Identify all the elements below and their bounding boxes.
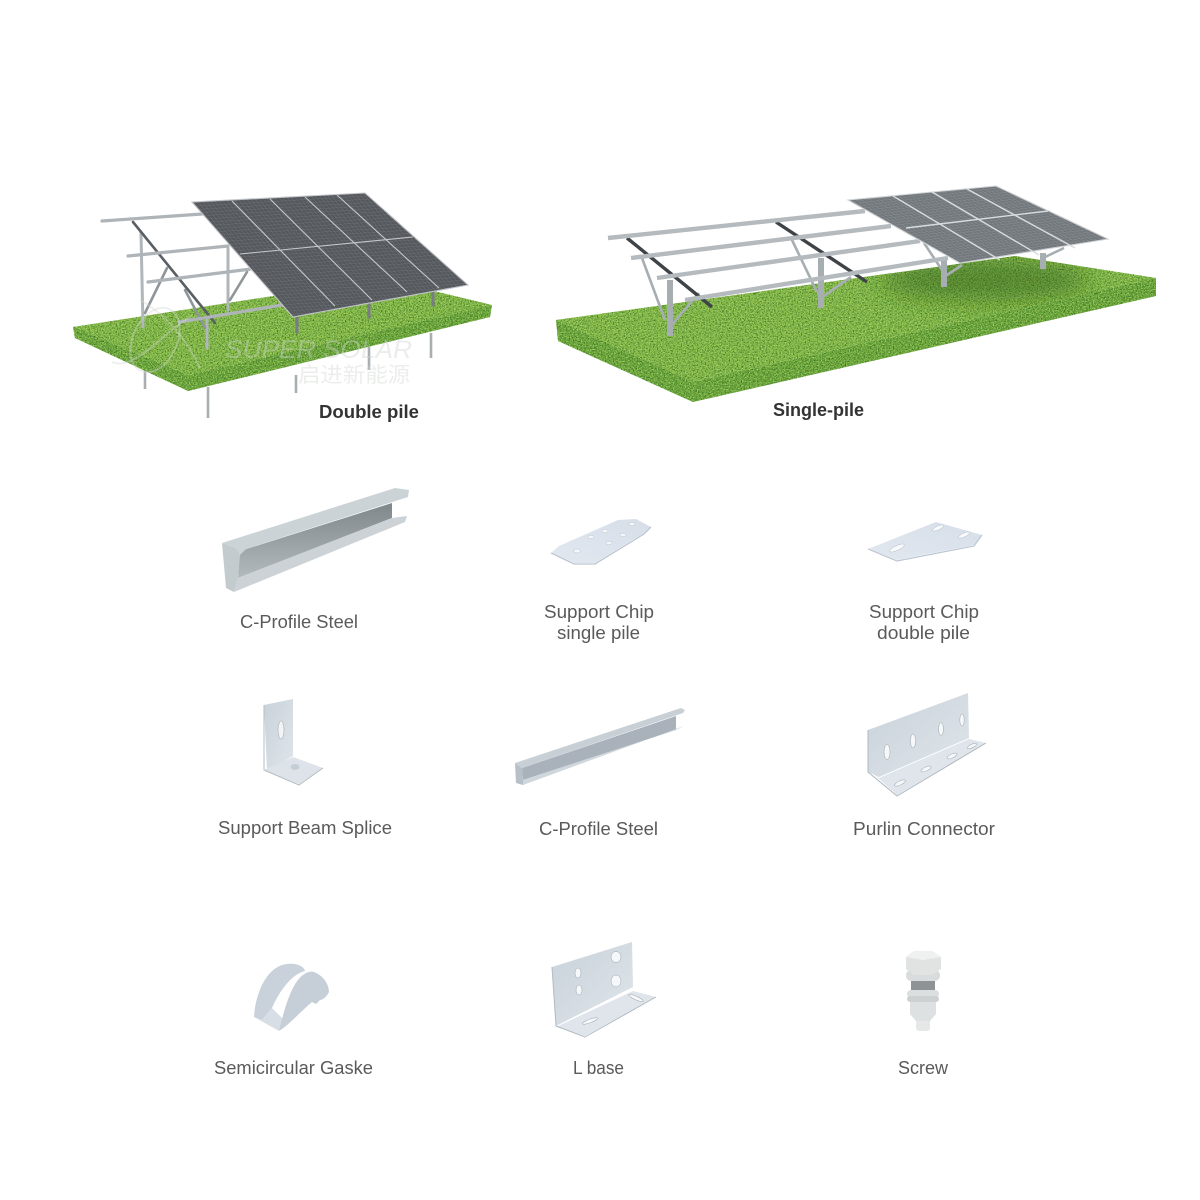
- label: [869, 602, 979, 643]
- heading: single pile: Single-pile: [773, 400, 864, 420]
- watermark: Super Solar logo: SUPER SOLAR: [225, 336, 412, 364]
- label: Support Beam Splice: [218, 818, 392, 838]
- label: C-Profile Steel: [240, 612, 358, 632]
- label: single pile: [557, 623, 640, 643]
- illustration: single pile mount: [556, 186, 1156, 402]
- part: support beam splice: [264, 699, 323, 785]
- part: support chip, single pile: [551, 519, 651, 564]
- label: Semicircular Gaske: [214, 1058, 373, 1078]
- heading: double pile: Double pile: [319, 402, 419, 422]
- buried pile legs: [145, 333, 431, 418]
- mounting frame: [102, 214, 433, 348]
- part: screw: [906, 951, 941, 1031]
- label: [544, 602, 654, 643]
- watermark: Super Solar logo: 启进新能源: [298, 364, 410, 387]
- grass block: [556, 256, 1156, 402]
- part: L base: [552, 942, 656, 1037]
- label: Purlin Connector: [853, 819, 995, 839]
- label: double pile: [877, 623, 970, 643]
- illustration: double pile mount: [73, 193, 492, 418]
- infographic canvas: [73, 186, 1156, 1074]
- label: C-Profile Steel: [539, 819, 658, 839]
- label: Support Chip: [544, 602, 654, 622]
- label: L base: [573, 1058, 624, 1078]
- mounting frame: [608, 211, 1064, 336]
- solar panel array: [848, 186, 1108, 263]
- label: Support Chip: [869, 602, 979, 622]
- label: Screw: [898, 1058, 949, 1078]
- part: C-profile steel, slim: [515, 708, 685, 785]
- part: purlin connector: [868, 693, 986, 796]
- part: C-profile steel, large: [222, 488, 409, 592]
- grass block: [73, 278, 492, 391]
- solar panel array: [192, 193, 468, 317]
- watermark: Super Solar logo: [112, 300, 412, 387]
- part: semicircular gasket: [254, 964, 329, 1031]
- part: support chip, double pile: [868, 522, 982, 561]
